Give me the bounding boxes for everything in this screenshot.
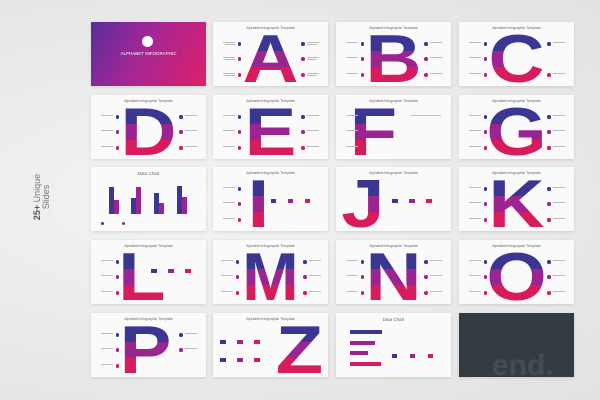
- bar chart: [350, 330, 433, 366]
- side label: 25+ Unique Slides: Slides: [41, 185, 51, 209]
- slide: G: [459, 95, 574, 159]
- slide: G: Alphabet Infographic Template: [492, 99, 541, 103]
- slide: A: [213, 22, 328, 86]
- slide: J: [336, 167, 451, 231]
- slide: L: Alphabet Infographic Template: [124, 244, 173, 248]
- slide: column data chart: [91, 167, 206, 231]
- slide: B: [336, 22, 451, 86]
- slide: column data chart: Data Chart: [138, 171, 159, 176]
- slide: E: Alphabet Infographic Template: [246, 99, 295, 103]
- slide: C: Alphabet Infographic Template: [492, 26, 541, 30]
- slide: N: Alphabet Infographic Template: [369, 244, 418, 248]
- slide: P: Alphabet Infographic Template: [124, 317, 173, 321]
- slide: horizontal bar chart: [336, 313, 451, 377]
- slide: K: Alphabet Infographic Template: [492, 171, 541, 175]
- icon: cover logo: [142, 36, 153, 47]
- column chart: [101, 186, 187, 225]
- slide: I: Alphabet Infographic Template: [246, 171, 295, 175]
- slide: L: [91, 240, 206, 304]
- side label: 25+ Unique Slides: 25+ Unique: [32, 174, 42, 220]
- slide: M: [213, 240, 328, 304]
- slide: J: Alphabet Infographic Template: [369, 171, 418, 175]
- cover title: ALPHABET INFOGRAPHIC: [121, 51, 176, 56]
- slide: M: Alphabet Infographic Template: [246, 244, 295, 248]
- slide: P: [91, 313, 206, 377]
- slide: F: [336, 95, 451, 159]
- slide: A: Alphabet Infographic Template: [246, 26, 295, 30]
- slide: I: [213, 167, 328, 231]
- slide: K: [459, 167, 574, 231]
- slide: Z: [213, 313, 328, 377]
- slide: D: [91, 95, 206, 159]
- slide: N: [336, 240, 451, 304]
- slide: end: [459, 313, 574, 377]
- slide: title cover: [91, 22, 206, 86]
- slide: E: [213, 95, 328, 159]
- slide: D: Alphabet Infographic Template: [124, 99, 173, 103]
- slide: C: [459, 22, 574, 86]
- side label: 25+ Unique Slides: [32, 174, 51, 220]
- slide: O: [459, 240, 574, 304]
- slide: O: Alphabet Infographic Template: [492, 244, 541, 248]
- slide: horizontal bar chart: Data Chart: [383, 317, 404, 322]
- slide: B: Alphabet Infographic Template: [369, 26, 418, 30]
- slide: Z: Alphabet Infographic Template: [246, 317, 295, 321]
- slide: F: Alphabet Infographic Template: [369, 99, 418, 103]
